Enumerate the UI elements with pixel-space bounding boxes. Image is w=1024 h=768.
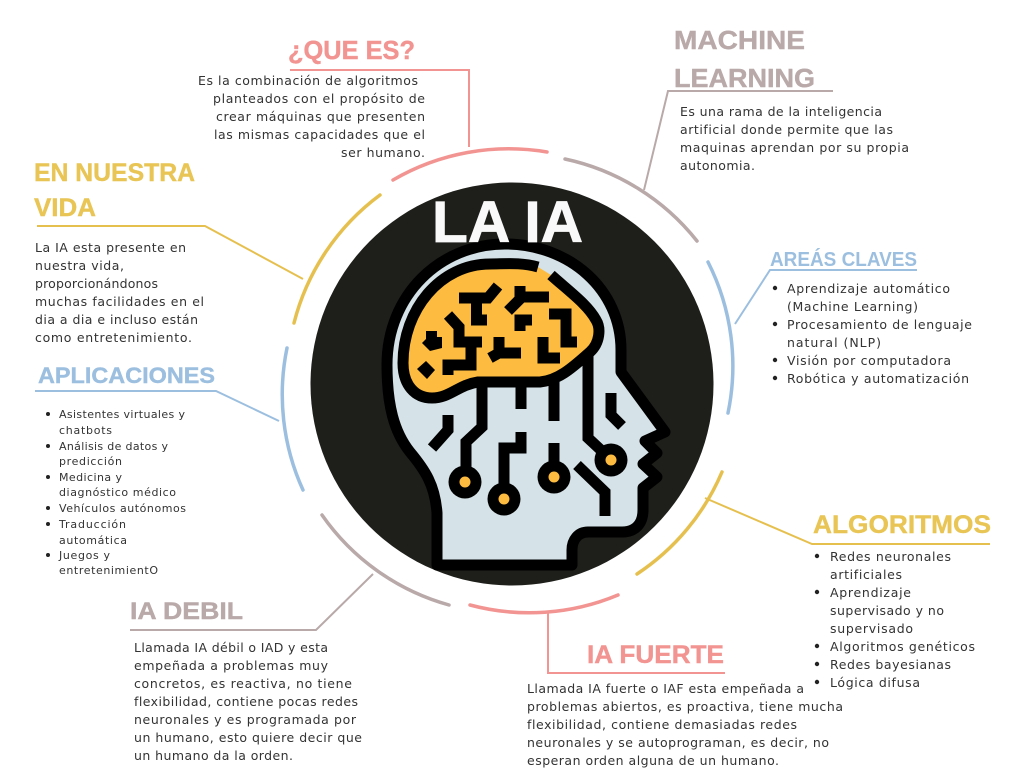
list: algoritmos: Algoritmos genéticos (830, 639, 975, 654)
list: areas claves: natural (NLP) (787, 335, 881, 350)
text: ia fuerte (527, 681, 843, 768)
text: que es (198, 73, 425, 160)
heading: en nuestra vida (34, 159, 195, 222)
text: en nuestra vida: La IA esta presente en (35, 240, 186, 255)
text: ia fuerte: problemas abiertos, es proactiva, tiene mucha (527, 699, 843, 714)
text: en nuestra vida (35, 240, 204, 345)
text: en nuestra vida: como entretenimiento. (35, 330, 192, 345)
heading: ia debil: IA DEBIL (130, 598, 243, 625)
heading: aplicaciones: APLICACIONES (38, 363, 215, 388)
text: machine learning: artificial donde permite que las (680, 122, 893, 137)
list: algoritmos: artificiales (830, 567, 902, 582)
text: ia debil: empeñada a problemas muy (134, 658, 329, 673)
list: algoritmos: supervisado (830, 621, 913, 636)
icon: head outline (387, 244, 665, 565)
text: que es: crear máquinas que presenten (216, 109, 425, 124)
text: ia debil: neuronales y es programada por (134, 712, 357, 727)
list: aplicaciones: entretenimientO (59, 564, 158, 577)
icon: brain (403, 264, 599, 398)
text: ia debil: un humano, esto quiere decir que (134, 730, 362, 745)
list: areas claves: Procesamiento de lenguaje (787, 317, 972, 332)
heading: que es: ¿QUE ES? (288, 35, 415, 65)
heading: en nuestra vida: EN NUESTRA (34, 159, 195, 187)
text: en nuestra vida: dia a dia e incluso están (35, 312, 198, 327)
list: aplicaciones: Vehículos autónomos (59, 502, 186, 515)
heading: ia fuerte: IA FUERTE (587, 641, 724, 669)
text: ia fuerte: flexibilidad, contiene demasiadas redes (527, 717, 797, 732)
list: aplicaciones: diagnóstico médico (59, 486, 176, 499)
text: que es: ser humano. (341, 145, 425, 160)
panel: en nuestra vida (34, 159, 303, 345)
text: ia fuerte: neuronales y se autoprograman, es decir, no (527, 735, 829, 750)
text: ia debil: Llamada IA débil o IAD y esta (134, 640, 328, 655)
central circle with head illustration (310, 182, 714, 586)
main title: LA IA (432, 190, 583, 255)
connector: que es (290, 70, 469, 147)
list: algoritmos: Redes neuronales (830, 549, 951, 564)
text: machine learning: Es una rama de la inteligencia (680, 104, 882, 119)
list: aplicaciones: chatbots (59, 424, 112, 437)
list: aplicaciones: automática (59, 534, 127, 547)
text: ia debil: concretos, es reactiva, no tiene (134, 676, 352, 691)
text: machine learning: autonomia. (680, 158, 755, 173)
text: que es: planteados con el propósito de (213, 91, 425, 106)
text: machine learning (680, 104, 909, 173)
list: algoritmos: Aprendizaje (830, 585, 911, 600)
heading: machine learning: MACHINE (674, 25, 805, 55)
list: aplicaciones (46, 408, 186, 577)
list: algoritmos: Redes bayesianas (830, 657, 951, 672)
text: machine learning: maquinas aprendan por su propia (680, 140, 909, 155)
text: ia debil: flexibilidad, contiene pocas redes (134, 694, 358, 709)
connector: algoritmos (705, 498, 990, 544)
ring arcs (282, 149, 733, 613)
list: areas claves: Aprendizaje automático (787, 281, 950, 296)
heading: machine learning (674, 25, 815, 93)
panel: ia fuerte (527, 612, 843, 768)
heading: areas claves: AREÁS CLAVES (770, 248, 917, 271)
text: ia debil (134, 640, 362, 763)
list: algoritmos (815, 549, 975, 690)
list: algoritmos: Lógica difusa (830, 675, 920, 690)
text: que es: Es la combinación de algoritmos (198, 73, 418, 88)
list: algoritmos: supervisado y no (830, 603, 944, 618)
list: aplicaciones: Traducción (58, 518, 126, 531)
panel: que es (198, 35, 469, 160)
panel: ia debil (130, 574, 373, 763)
panel: algoritmos (705, 498, 991, 690)
list: aplicaciones: Medicina y (59, 471, 122, 484)
heading: en nuestra vida: VIDA (34, 194, 96, 222)
list: aplicaciones: Juegos y (58, 549, 110, 562)
connector: areas claves (735, 270, 917, 324)
list: areas claves (773, 281, 972, 386)
text: en nuestra vida: muchas facilidades en el (35, 294, 204, 309)
panel: aplicaciones (35, 363, 279, 577)
text: en nuestra vida: proporcionándonos (35, 276, 158, 291)
text: ia fuerte: esperan orden alguna de un humano. (527, 753, 779, 768)
text: ia fuerte: Llamada IA fuerte o IAF esta empeñada a (527, 681, 804, 696)
list: areas claves: Robótica y automatización (787, 371, 969, 386)
list: areas claves: Visión por computadora (787, 353, 951, 368)
text: que es: las mismas capacidades que el (214, 127, 425, 142)
connector: en nuestra vida (37, 226, 303, 279)
list: aplicaciones: predicción (59, 455, 122, 468)
list: areas claves: (Machine Learning) (787, 299, 918, 314)
icon: circuit lines (432, 355, 628, 516)
connector: aplicaciones (35, 391, 279, 421)
heading: machine learning: LEARNING (674, 63, 815, 93)
list: aplicaciones: Asistentes virtuales y (59, 408, 185, 421)
heading: algoritmos: ALGORITMOS (813, 511, 991, 539)
panel: machine learning (644, 25, 909, 190)
connector: ia fuerte (548, 612, 725, 673)
connector: ia debil (130, 574, 373, 630)
text: ia debil: un humano da la orden. (134, 748, 293, 763)
connector: machine learning (644, 91, 833, 190)
list: aplicaciones: Análisis de datos y (59, 440, 168, 453)
text: en nuestra vida: nuestra vida, (35, 258, 124, 273)
panel: areas claves (735, 248, 972, 386)
